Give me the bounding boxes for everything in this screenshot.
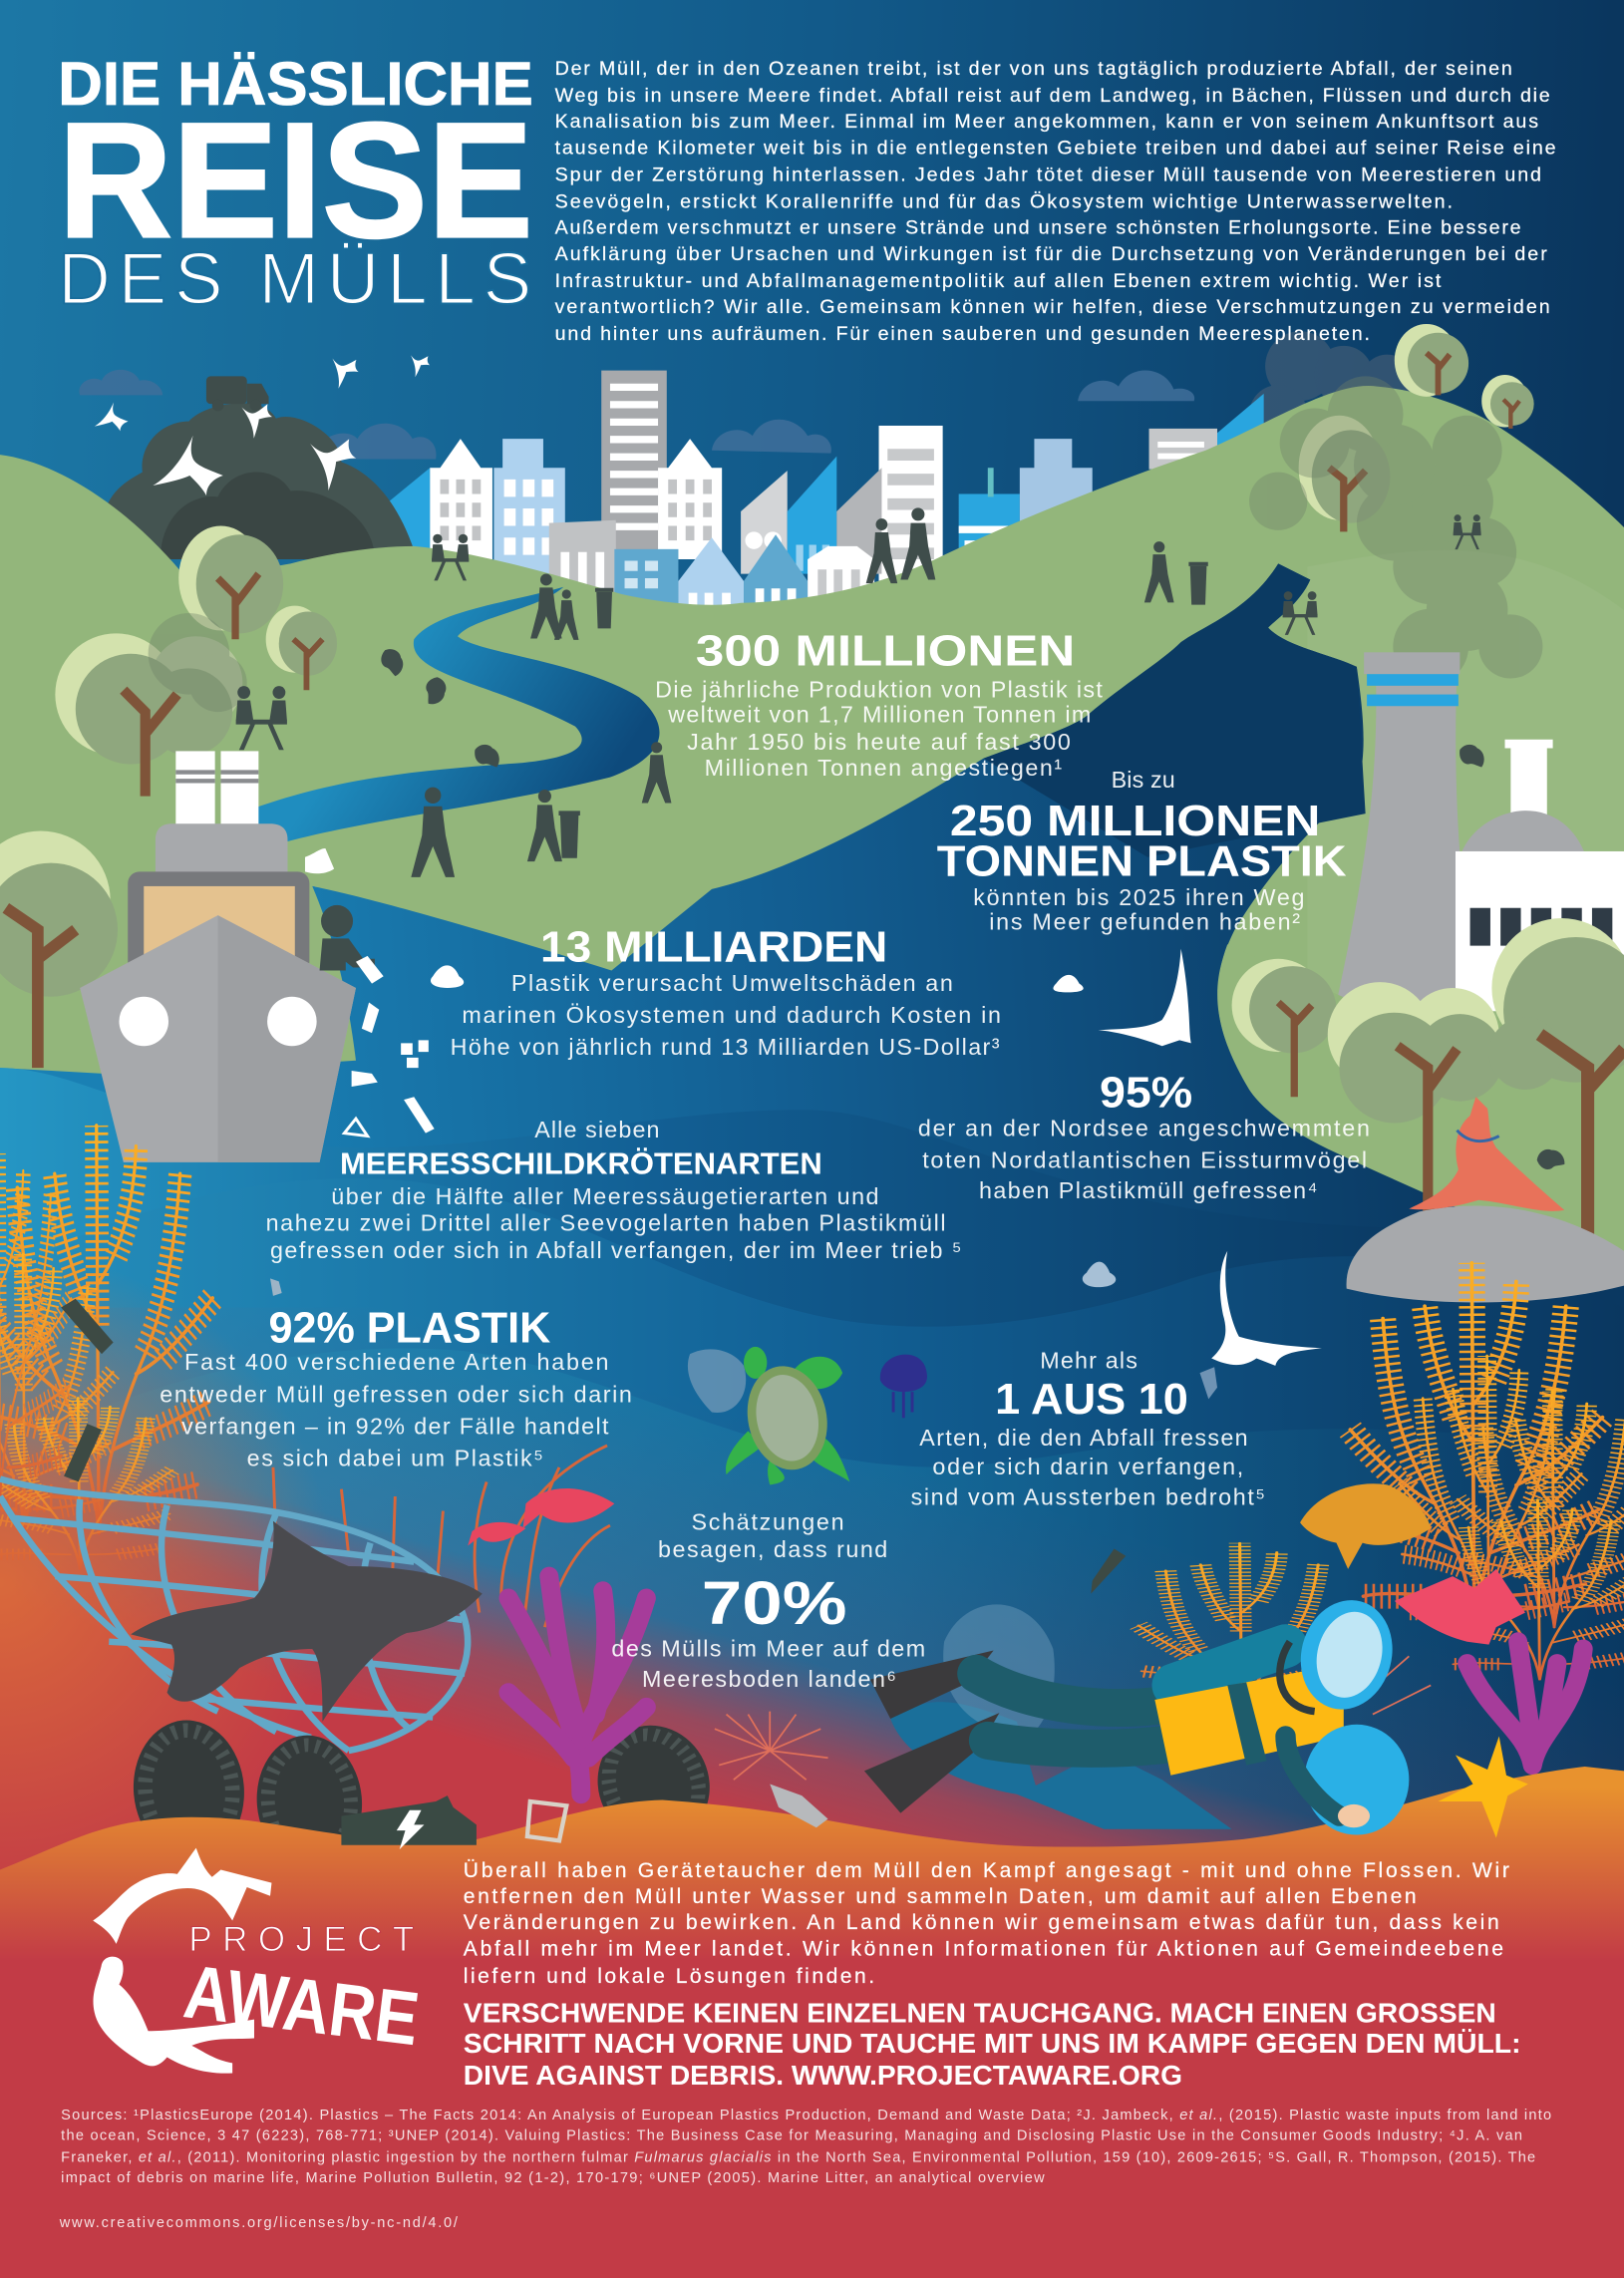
right shore with trees [1218, 918, 1624, 1286]
purple coral [508, 1576, 1583, 1794]
trees on hills [55, 324, 1534, 797]
stat: 250 Millionen Tonnen Plastik: ins Meer gefunden haben² [989, 909, 1300, 935]
stat: 13 Milliarden: Plastik verursacht Umweltschäden an [511, 970, 953, 996]
stat: 13 Milliarden: Höhe von jährlich rund 13 Milliarden US-Dollar³ [451, 1034, 1000, 1060]
bottles in coral [61, 1299, 114, 1354]
stat: 95% [918, 1068, 1370, 1203]
stat: 1 aus 10: 1 AUS 10 [995, 1375, 1188, 1424]
stat: 13 Milliarden [451, 923, 1001, 1060]
orange glow at left [0, 1249, 349, 1918]
tall cooling tower [1334, 652, 1481, 1017]
portholes [119, 997, 168, 1046]
ghost jellyfish [943, 1604, 1055, 1737]
floating rubbish [270, 848, 1217, 1399]
stat: 250 Millionen Tonnen Plastik: 250 MILLIONEN [950, 797, 1320, 845]
tree in smoke [1299, 416, 1390, 531]
stat: 95%: 95% [1100, 1068, 1192, 1117]
stat: 95%: haben Plastikmüll gefressen⁴ [979, 1177, 1318, 1203]
fish pink [1395, 1569, 1525, 1645]
stat: 95%: der an der Nordsee angeschwemmten [918, 1116, 1370, 1141]
sources: Franeker, et al., (2011). Monitoring plastic ingestion by the northern fulmar Fulmarus glacialis in the North Sea, Environmental Pollution, 159 (10), 2609-2615; ⁵S. Gall, R. Thompson, (2015). The [61, 2149, 1535, 2165]
waves [0, 1068, 1624, 2278]
stat: Meeresschildkröten: nahezu zwei Drittel aller Seevogelarten haben Plastikmüll [266, 1209, 946, 1235]
plastic bag [688, 1349, 746, 1413]
city skyline [389, 371, 1264, 625]
fish red [468, 1488, 614, 1546]
stat: 13 Milliarden: 13 MILLIARDEN [540, 923, 887, 972]
intro paragraph: Weg bis in unsere Meere findet. Abfall reist auf dem Landweg, in Bächen, Flüssen und durch die [555, 85, 1550, 107]
bold call to action [464, 1998, 1521, 2091]
seabed rubbish [527, 1736, 1528, 1840]
person on deck [320, 905, 375, 970]
intro paragraph: Spur der Zerstörung hinterlassen. Jedes Jahr tötet dieser Müll tausende von Meerestieren und [555, 163, 1541, 185]
hose [1280, 1642, 1315, 1712]
stat: 300 Millionen: weltweit von 1,7 Millionen Tonnen im [667, 701, 1091, 727]
call to action paragraph: entfernen den Müll unter Wasser und sammeln Daten, um damit auf allen Ebenen [464, 1885, 1417, 1908]
rock and seal [1347, 1097, 1624, 1302]
stat: 70%: Schätzungen [692, 1509, 844, 1535]
bridge [128, 871, 309, 973]
stat: 70%: 70% [702, 1569, 846, 1637]
stat: 1 aus 10: Arten, die den Abfall fressen [919, 1425, 1248, 1451]
stat: 300 Millionen [655, 626, 1103, 781]
winding river [239, 587, 659, 850]
green hills [0, 386, 1624, 1308]
fish orange [1300, 1483, 1431, 1569]
stat: 70%: Meeresboden landen⁶ [642, 1666, 896, 1692]
upper deck [156, 823, 287, 879]
intro paragraph: und hinter uns aufräumen. Für einen sauberen und gesunden Meeresplaneten. [555, 323, 1370, 345]
right coral [1091, 1263, 1624, 1723]
tree [178, 526, 283, 639]
red seabed gradient [0, 1308, 1624, 2278]
fishing net [0, 1479, 468, 1751]
tyres [128, 1707, 729, 1872]
tree [1488, 918, 1624, 1235]
tall white building [879, 426, 943, 585]
title line 3: DES MÜLLS [58, 239, 531, 320]
intro paragraph: Außerdem verschmutzt er unsere Strände und unsere schönsten Erholungsorte. Eine bessere [555, 217, 1521, 239]
bottle [770, 1785, 828, 1827]
people on the hills [236, 507, 1484, 877]
legs [976, 1674, 1176, 1749]
sources: the ocean, Science, 3 47 (6223), 768-771; ³UNEP (2014). Valuing Plastics: The Business Case for Measuring, Managing and Disclosing Plastic Use in the Consumer Goods Industry; ⁴J. A. van [61, 2128, 1522, 2144]
stat: 95%: toten Nordatlantischen Eissturmvögel [922, 1147, 1367, 1173]
light blue building [493, 439, 565, 574]
seal [1409, 1097, 1564, 1211]
sources: impact of debris on marine life, Marine Pollution Bulletin, 92 (1-2), 170-179; ⁶UNEP (2005). Marine Litter, an analytical overview [61, 2170, 1045, 2186]
bird lower [1211, 1251, 1322, 1366]
stat: 300 Millionen: Die jährliche Produktion von Plastik ist [655, 676, 1103, 702]
call to action paragraph: Überall haben Gerätetaucher dem Müll den Kampf angesagt - mit und ohne Flossen. Wir [464, 1859, 1509, 1882]
arm [1286, 1736, 1339, 1816]
bag [1304, 1725, 1409, 1835]
flippers [726, 1357, 849, 1484]
stat: 92% Plastik: Fast 400 verschiedene Arten haben [184, 1349, 609, 1375]
garbage truck [206, 376, 269, 411]
sky birds [95, 347, 434, 495]
funnels [175, 751, 258, 831]
sources [61, 2108, 1551, 2186]
intro paragraph: tausende Kilometer weit bis in die entlegensten Gebiete treiben und dabei auf seiner Reise eine [555, 137, 1556, 159]
stat: Meeresschildkröten: MEERESSCHILDKRÖTENARTEN [340, 1145, 822, 1180]
stat: 1 aus 10: Mehr als [1040, 1348, 1137, 1374]
word: AWARE: AWARE [179, 1949, 424, 2062]
word: PROJECT: PROJECT [188, 1920, 414, 1959]
stat: 13 Milliarden: marinen Ökosystemen und dadurch Kosten in [462, 1002, 1001, 1028]
intro paragraph: Aufklärung über Ursachen und Wirkungen ist für die Durchsetzung von Veränderungen bei der [555, 243, 1547, 265]
shark [131, 1521, 483, 1722]
diver silhouette [94, 1957, 254, 2074]
crate [527, 1801, 566, 1840]
large tree [55, 633, 242, 797]
dark river head [983, 563, 1366, 857]
turtle and plastic bag [688, 1347, 849, 1484]
bold call to action: DIVE AGAINST DEBRIS. WWW.PROJECTAWARE.ORG [464, 2060, 1182, 2091]
blue block [959, 468, 1020, 566]
intro paragraph: Seevögeln, erstickt Korallenriffe und für das Ökosystem wichtige Unterwasserwelten. [555, 190, 1453, 212]
mask [1289, 1590, 1405, 1720]
bold call to action: VERSCHWENDE KEINEN EINZELNEN TAUCHGANG. MACH EINEN GROSSEN [464, 1998, 1496, 2029]
stat: 92% Plastik: entweder Müll gefressen oder sich darin [160, 1381, 632, 1407]
yellow suit [1154, 1664, 1344, 1776]
tree [266, 606, 337, 690]
stat: 1 aus 10 [911, 1348, 1265, 1510]
stat: 92% Plastik: verfangen – in 92% der Fälle handelt [181, 1413, 609, 1439]
bold call to action: SCHRITT NACH VORNE UND TAUCHE MIT UNS IM KAMPF GEGEN DEN MÜLL: [464, 2028, 1521, 2059]
stat: Meeresschildkröten: Alle sieben [534, 1117, 660, 1142]
starfish [1438, 1736, 1528, 1837]
stat: 250 Millionen Tonnen Plastik: könnten bis 2025 ihren Weg [973, 884, 1304, 910]
wave 1 [0, 1068, 1624, 2278]
tree top right [1395, 324, 1468, 397]
hull [80, 915, 356, 1162]
stat: Meeresschildkröten: gefressen oder sich in Abfall verfangen, der im Meer trieb ⁵ [270, 1237, 962, 1263]
factory smoke [149, 376, 1542, 712]
wave 2 [0, 1178, 1624, 2278]
shell [738, 1359, 836, 1477]
stat: 70% [611, 1509, 925, 1692]
stat: 300 Millionen: Jahr 1950 bis heute auf fast 300 [687, 729, 1071, 755]
cloud left [79, 370, 162, 395]
title line 1: DIE HÄSSLICHE [58, 50, 533, 118]
left shore tree [0, 831, 118, 1068]
call to action paragraph: Abfall mehr im Meer landet. Wir können Informationen für Aktionen auf Gemeindeebene [464, 1937, 1503, 1960]
tree [1232, 959, 1337, 1097]
stat: 300 Millionen: Millionen Tonnen angestiegen¹ [705, 755, 1062, 781]
licence link: www.creativecommons.org/licenses/by-nc-nd/4.0/ [59, 2215, 459, 2231]
stat: 250 Millionen Tonnen Plastik [937, 767, 1347, 935]
hammerhead shark [93, 1848, 271, 1944]
clouds [79, 370, 1194, 459]
fins [870, 1650, 994, 1719]
stat: Meeresschildkröten: über die Hälfte aller Meeressäugetierarten und [331, 1183, 879, 1209]
sandy seabed [0, 1767, 1624, 2278]
wave 3 [0, 1348, 1624, 2278]
white pointed building [430, 439, 492, 559]
stat: 92% Plastik [160, 1304, 632, 1470]
tree top right small [1481, 375, 1534, 429]
intro paragraph: Der Müll, der in den Ozeanen treibt, ist der von uns tagtäglich produzierte Abfall, der seinen [555, 58, 1512, 80]
head [744, 1347, 767, 1379]
foreground houses [549, 520, 874, 625]
tank [1173, 1646, 1286, 1685]
smoke in the sky [1249, 331, 1414, 443]
blue coral rock [890, 1702, 1232, 1829]
sea grass [273, 1446, 610, 1627]
jellyfish [880, 1355, 927, 1418]
stat: 250 Millionen Tonnen Plastik: Bis zu [1112, 767, 1175, 793]
Project Aware logo [93, 1848, 424, 2074]
stat: 250 Millionen Tonnen Plastik: TONNEN PLASTIK [937, 837, 1347, 886]
left coral [0, 1126, 212, 1569]
tall grey tower [601, 371, 667, 559]
intro paragraph [555, 58, 1556, 345]
stat: 1 aus 10: oder sich darin verfangen, [932, 1454, 1243, 1479]
diver [864, 1590, 1409, 1835]
white sea birds [1099, 949, 1322, 1366]
car battery [341, 1795, 477, 1849]
white pointed building 2 [658, 439, 722, 559]
hand [1338, 1804, 1370, 1827]
stat: 1 aus 10: sind vom Aussterben bedroht⁵ [911, 1484, 1265, 1510]
intro paragraph: Infrastruktur- und Abfallmanagementpolitik auf allen Ebenen extrem wichtig. Wer ist [555, 270, 1442, 292]
sources: Sources: ¹PlasticsEurope (2014). Plastics – The Facts 2014: An Analysis of European Plastics Production, Demand and Waste Data; ²J. Jambeck, et al., (2015). Plastic waste inputs from land into [61, 2108, 1551, 2123]
stat: 300 Millionen: 300 MILLIONEN [696, 626, 1075, 675]
window [144, 886, 295, 959]
blue triangles [389, 394, 1264, 559]
darker hill tier on right [1307, 550, 1624, 1017]
call to action paragraph: liefern und lokale Lösungen finden. [464, 1965, 874, 1988]
ship [80, 751, 375, 1162]
stat: 70%: des Mülls im Meer auf dem [611, 1635, 925, 1661]
stat: 92% Plastik: 92% PLASTIK [269, 1304, 551, 1353]
bird upper [1099, 949, 1191, 1046]
stat: 70%: besagen, dass rund [658, 1536, 887, 1562]
landfill hill [101, 376, 417, 559]
ocean [0, 563, 1624, 2278]
intro paragraph: verantwortlich? Wir alle. Gemeinsam können wir helfen, diese Verschmutzungen zu vermeiden [555, 296, 1550, 318]
call to action paragraph [464, 1859, 1509, 1988]
intro paragraph: Kanalisation bis zum Meer. Einmal im Meer angekommen, kann er von seinem Ankunftsort aus [555, 111, 1538, 133]
pale buildings behind smoke [1020, 439, 1093, 544]
factory building [1456, 740, 1624, 1011]
title line 2: REISE [58, 89, 533, 272]
urchin spikes [715, 1634, 1431, 1780]
stat: Meeresschildkröten [266, 1117, 962, 1263]
tree [1328, 982, 1503, 1213]
stat: 92% Plastik: es sich dabei um Plastik⁵ [247, 1445, 543, 1470]
slanted buildings [741, 457, 881, 574]
call to action paragraph: Veränderungen zu bewirken. An Land können wir gemeinsam etwas dafür tun, dass kein [464, 1911, 1499, 1934]
headline [58, 50, 533, 320]
